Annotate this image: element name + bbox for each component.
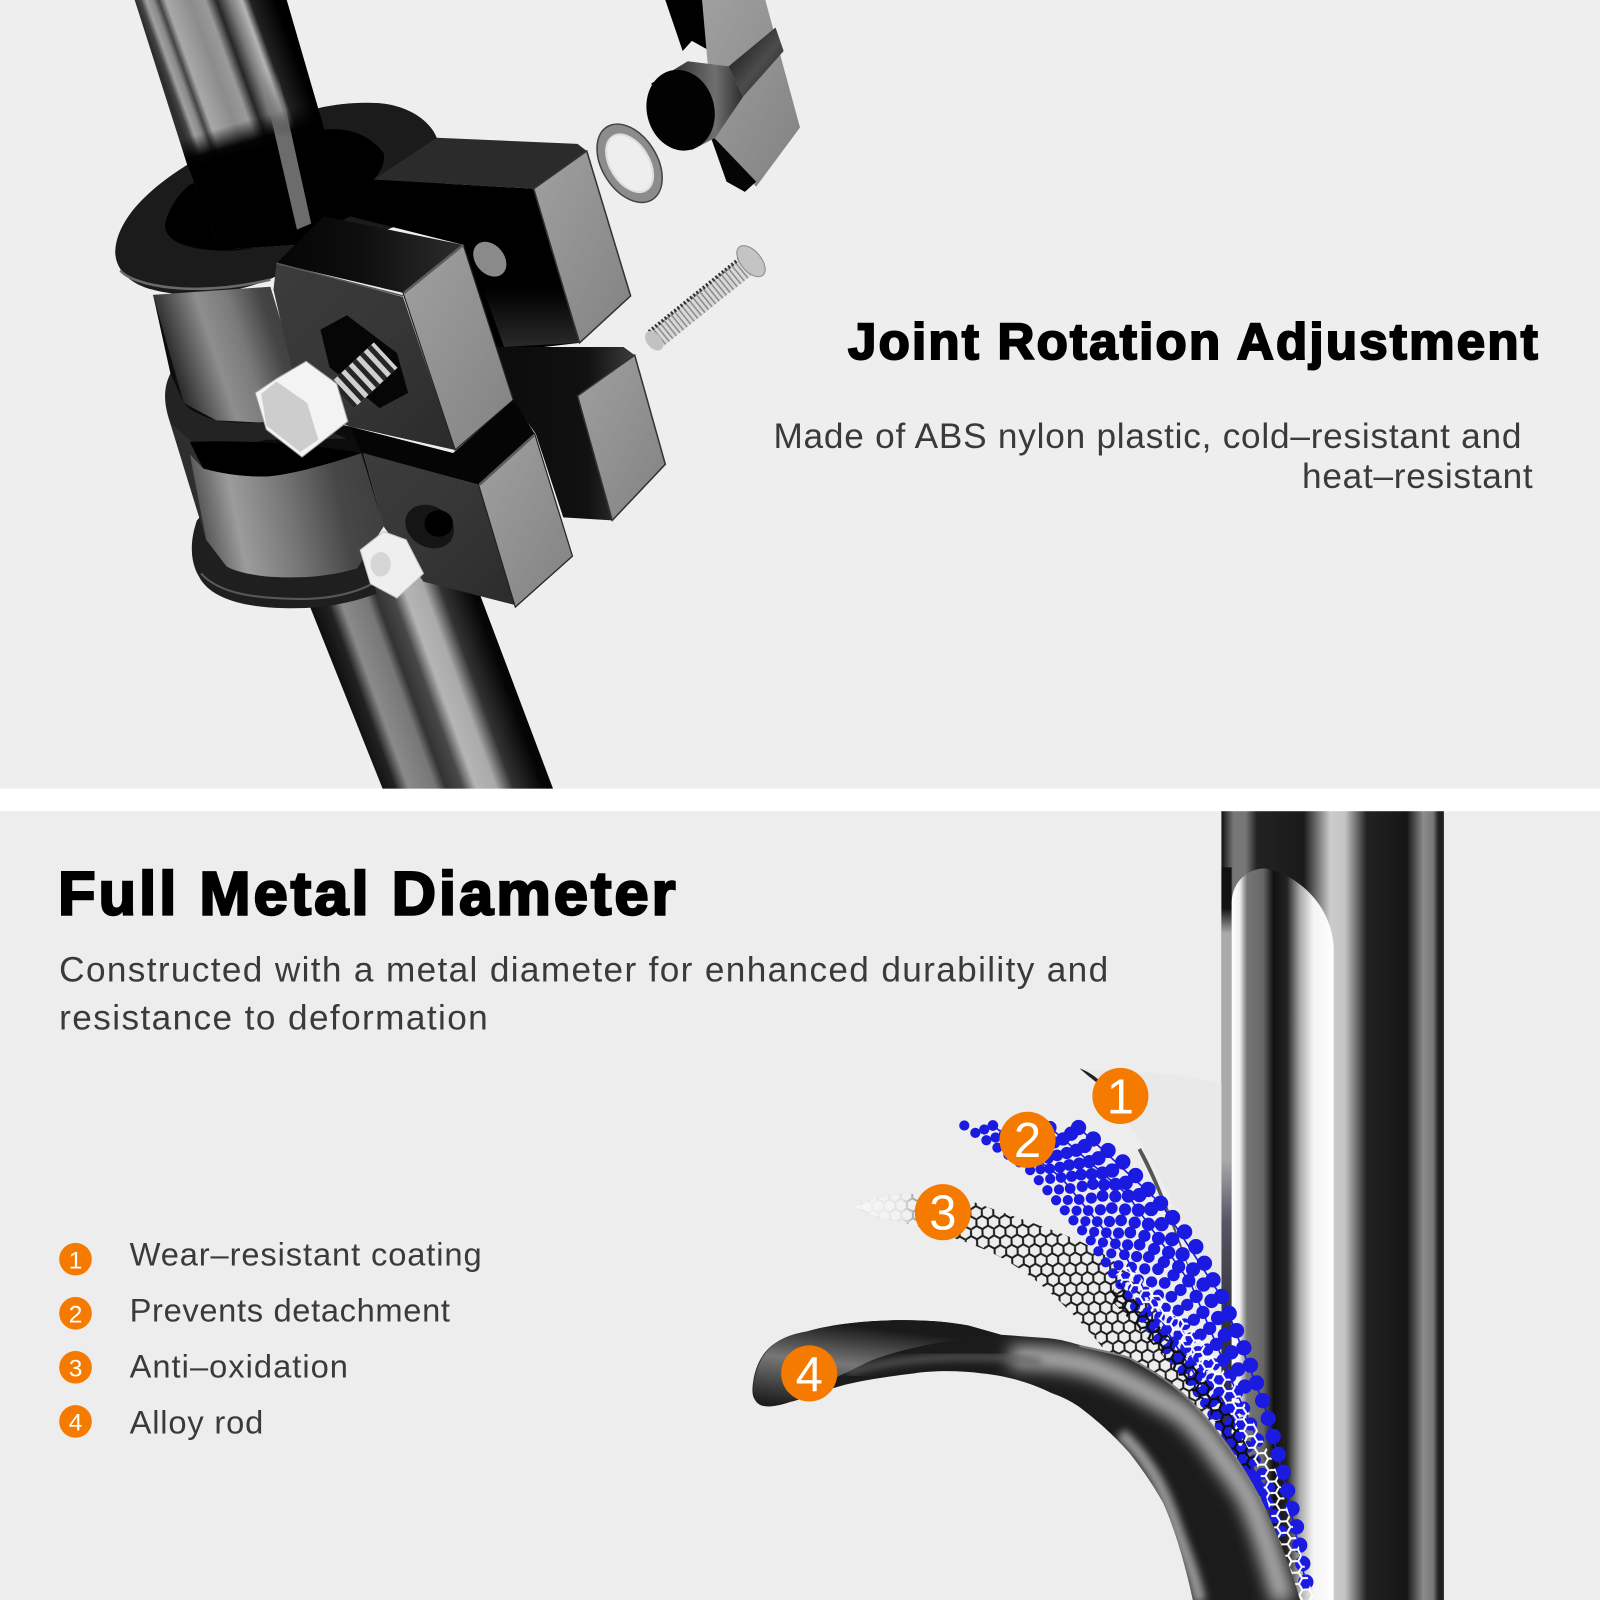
divider band [0,789,1600,811]
panel: joint rotation adjustment [0,0,1600,789]
front lower block [350,400,572,607]
heading: joint rotation adjustment: Joint Rotation Adjustment [848,313,1538,370]
illustration: layered metal tube [752,811,1444,1600]
legend item 1: Wear–resistant coating [130,1235,482,1272]
lower barrel wall [170,423,245,566]
illustration: exploded rod clamp [115,0,800,789]
legend item 4: 4 [69,1410,82,1437]
top flange with lobe [115,103,449,295]
legend item 3: Anti–oxidation [130,1348,348,1385]
legend [59,1235,482,1441]
legend item 1: 1 [69,1247,82,1274]
washer [584,112,676,214]
upper barrel [153,287,302,422]
legend item 2: Prevents detachment [130,1291,450,1328]
wing knob [638,0,800,192]
layer 4: alloy rod [752,1320,1300,1600]
callout badge 2 [999,1112,1056,1168]
description: metal diameter [59,951,1108,1038]
middle ring [165,373,347,445]
screw [641,241,771,354]
callout badge 4 [781,1345,837,1402]
hex recess [320,315,408,408]
lower barrel [190,453,384,577]
description: metal diameter: Constructed with a metal diameter for enhanced durability and [59,951,1108,990]
legend item 4: Alloy rod [130,1404,263,1441]
flange rim highlight [201,573,372,599]
clamp slot [190,441,361,477]
back upper clamp block [350,138,631,403]
legend item 3: 3 [69,1356,82,1383]
description: metal diameter: resistance to deformation [59,999,488,1038]
bolt thread [342,355,386,396]
callout badge 1 [1092,1068,1148,1124]
upper rod [135,0,350,250]
description: joint rotation: heat–resistant [1302,457,1533,496]
panel: full metal diameter [0,811,1600,1600]
legend item 4 [59,1404,263,1441]
bottom flange [192,510,377,608]
layer 1: wear-resistant coating [1080,1068,1221,1327]
callout badge 1: 1 [1107,1070,1134,1124]
legend item 2: 2 [69,1301,82,1328]
lower rod [296,561,553,789]
nut [360,532,423,598]
flange opening [165,129,384,251]
bolt head [255,361,348,457]
callout badge 3 [915,1184,971,1241]
callout badge 3: 3 [929,1187,956,1241]
layer 2: blue molecular lattice [964,1126,1307,1590]
callout badge 2: 2 [1014,1114,1041,1168]
layer 3 overlay: white hex strip [1114,1264,1314,1600]
layer 3: hex mesh [855,1194,1291,1600]
description: joint rotation [773,417,1533,496]
description: joint rotation: Made of ABS nylon plastic, cold–resistant and [773,417,1521,456]
barrel backing [153,295,384,540]
back lower clamp block [480,347,665,520]
layer 3 overlay: black hex strip [1107,1284,1259,1472]
threaded hole [397,496,462,557]
flange rim highlight [120,270,270,289]
callout badge 4: 4 [796,1348,823,1402]
vertical tube [1221,811,1444,1600]
heading: full metal diameter: Full Metal Diameter [58,859,676,927]
front upper block [273,216,513,450]
